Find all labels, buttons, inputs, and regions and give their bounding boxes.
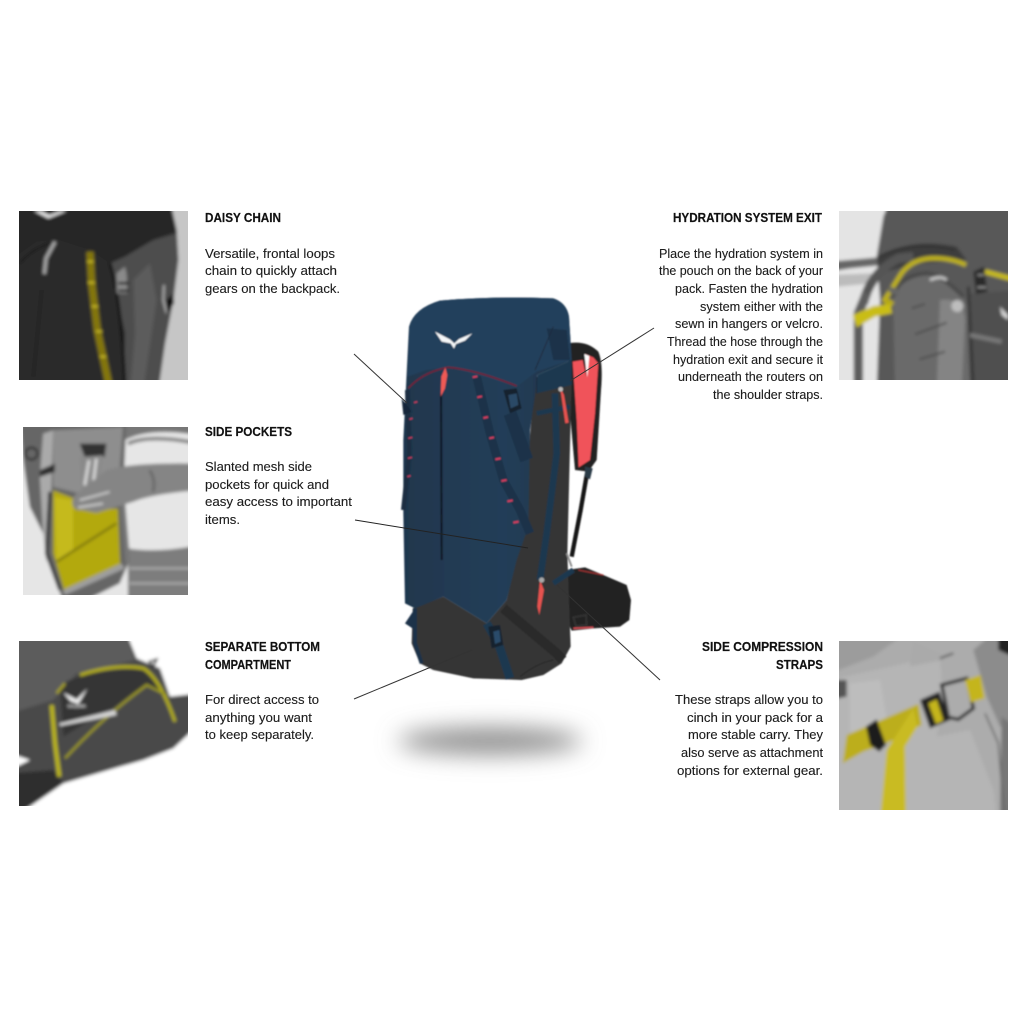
pointer line: hydration exit (570, 328, 654, 381)
text block: daisy chain: gears on the backpack. (205, 281, 340, 296)
text block: hydration system exit: Place the hydration system in (659, 246, 823, 261)
text block: side pockets: SIDE POCKETS (205, 424, 292, 439)
text block: hydration system exit: sewn in hangers or velcro. (675, 316, 823, 331)
text block: separate bottom compartment: COMPARTMENT (205, 657, 291, 672)
text block: hydration system exit: system either with the (700, 299, 823, 314)
text block: side compression straps (675, 639, 824, 778)
text block: side compression straps: also serve as attachment (681, 745, 823, 760)
text block: separate bottom compartment: anything you want (205, 710, 312, 725)
hip belt (564, 567, 631, 631)
text block: separate bottom compartment (205, 639, 320, 742)
text block: daisy chain: Versatile, frontal loops (205, 246, 335, 261)
text block: side pockets: Slanted mesh side (205, 459, 312, 474)
text block: side pockets: items. (205, 512, 240, 527)
top lid (408, 298, 572, 387)
main backpack illustration (402, 298, 631, 680)
charcoal side and bottom panels (412, 377, 572, 680)
text block: separate bottom compartment: For direct access to (205, 692, 319, 707)
text block: hydration system exit: underneath the routers on (678, 369, 823, 384)
text block: separate bottom compartment: SEPARATE BOTTOM (205, 639, 320, 654)
text block: hydration system exit: the shoulder straps. (713, 387, 823, 402)
text block: hydration system exit: HYDRATION SYSTEM EXIT (673, 210, 822, 225)
text block: hydration system exit: the pouch on the back of your (659, 263, 824, 278)
shoulder harness with red lining (568, 343, 602, 557)
text block: side compression straps: options for external gear. (677, 763, 823, 778)
text block: side pockets: pockets for quick and (205, 477, 329, 492)
daisy chain webbing left (402, 390, 417, 510)
bottom compartment straps (405, 608, 563, 678)
photo: separate bottom compartment detail (19, 641, 188, 806)
text block: side compression straps: SIDE COMPRESSION (702, 639, 823, 654)
text block: side compression straps: STRAPS (776, 657, 823, 672)
text block: daisy chain: DAISY CHAIN (205, 210, 281, 225)
text block: side pockets: easy access to important (205, 494, 352, 509)
text block: side compression straps: more stable carry. They (688, 727, 823, 742)
photo: hydration system exit detail (839, 211, 1008, 380)
photo: separate bottom compartment detail: SALEWA (67, 703, 87, 708)
navy main body (403, 298, 572, 623)
photo: side compression straps detail (839, 641, 1008, 810)
pointer line: side pockets (355, 520, 528, 548)
text block: side pockets (205, 424, 352, 527)
photo: daisy chain detail (19, 211, 188, 380)
pointer line: compression straps (557, 585, 660, 680)
text block: hydration system exit: pack. Fasten the hydration (675, 281, 823, 296)
upper compression buckle (503, 388, 527, 460)
daisy chain webbing right (473, 376, 530, 533)
text block: hydration system exit: Thread the hose through the (667, 334, 823, 349)
logo (435, 332, 472, 349)
text block: separate bottom compartment: to keep separately. (205, 727, 314, 742)
red cord and front zipper (408, 367, 517, 560)
text block: side compression straps: cinch in your pack for a (687, 710, 824, 725)
photo: side pockets detail (23, 427, 188, 595)
text block: daisy chain (205, 210, 340, 296)
text block: side compression straps: These straps allow you to (675, 692, 823, 707)
text block: hydration system exit (659, 210, 824, 402)
side panel straps and zips (537, 377, 573, 615)
backpack floating shadow (398, 728, 582, 754)
text block: daisy chain: chain to quickly attach (205, 263, 337, 278)
text block: hydration system exit: hydration exit and secure it (673, 352, 823, 367)
pointer line: daisy chain (354, 354, 407, 403)
pointer line: bottom compartment (354, 650, 472, 699)
